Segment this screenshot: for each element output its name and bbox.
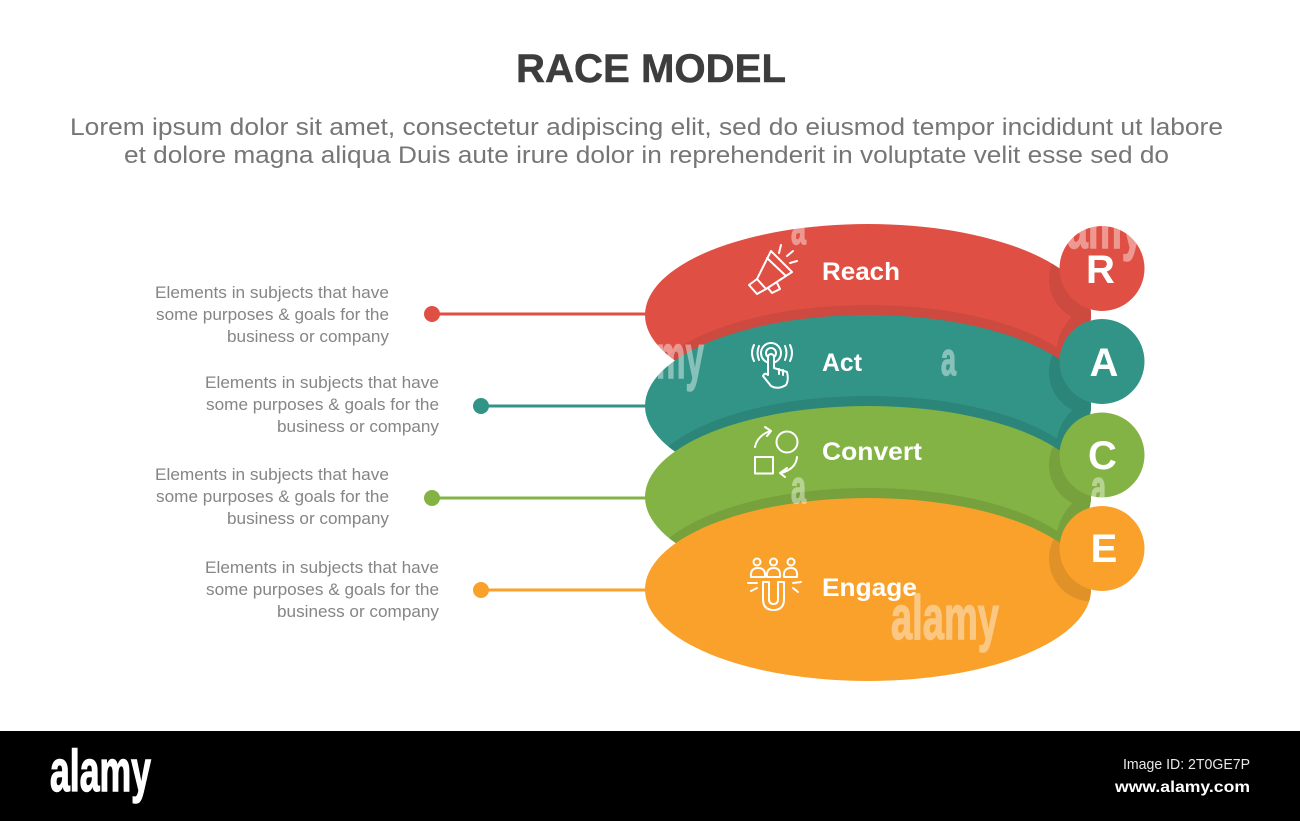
- label: Reach: Reach: [822, 258, 900, 286]
- description: reach: [155, 283, 390, 346]
- description: reach: Elements in subjects that have: [155, 283, 389, 302]
- watermark overlays: alamy: [1035, 193, 1143, 262]
- label: Engage: Engage: [822, 574, 917, 602]
- badge: C: [1060, 412, 1144, 498]
- badge: A: A: [1090, 341, 1118, 385]
- website: www.alamy.com: [1114, 779, 1250, 796]
- description: convert: business or company: [227, 509, 390, 528]
- connector: convert: [424, 490, 650, 506]
- description: convert: [155, 465, 390, 528]
- watermark overlays: a: [1091, 461, 1106, 513]
- title: RACE MODEL: [516, 47, 786, 91]
- watermark overlays: a: [941, 333, 956, 385]
- badge: E: [1060, 506, 1144, 591]
- subtitle: Lorem ipsum dolor sit amet, consectetur adipiscing elit, sed do eiusmod tempor incididunt ut labore: [70, 114, 1223, 141]
- icon: shapes and arrows: [755, 427, 798, 477]
- band: act: [645, 315, 1091, 452]
- band: engage: [645, 498, 1135, 681]
- description: engage: some purposes & goals for the: [206, 580, 439, 599]
- label: Convert: Convert: [822, 438, 923, 466]
- image id: Image ID: 2T0GE7P: [1123, 756, 1250, 773]
- badge: A: [1060, 319, 1144, 404]
- description: engage: [205, 558, 440, 621]
- connector: engage: [473, 582, 650, 598]
- badge: R: [1060, 226, 1144, 311]
- watermark overlays: alamy: [891, 584, 999, 653]
- description: act: business or company: [277, 417, 440, 436]
- description: engage: business or company: [277, 602, 440, 621]
- label: Act: Act: [822, 349, 863, 377]
- connector: reach: [424, 306, 650, 322]
- subtitle: et dolore magna aliqua Duis aute irure dolor in reprehenderit in voluptate velit esse sed do: [124, 142, 1169, 169]
- description: act: Elements in subjects that have: [205, 373, 439, 392]
- icon: magnet with people: [748, 558, 801, 610]
- description: act: [205, 373, 440, 436]
- watermark overlays: a: [791, 202, 806, 254]
- description: reach: business or company: [227, 327, 390, 346]
- watermark overlays: [656, 193, 1143, 653]
- badge: C: C: [1088, 434, 1117, 478]
- footer bar: [0, 731, 1300, 821]
- footer logo: alamy: [50, 739, 151, 804]
- description: act: some purposes & goals for the: [206, 395, 439, 414]
- subtitle: [70, 114, 1223, 169]
- badge: E: E: [1091, 527, 1117, 571]
- description: convert: Elements in subjects that have: [155, 465, 389, 484]
- icon: tap hand: [752, 343, 792, 388]
- watermark overlays: my: [656, 323, 704, 392]
- connector: act: [473, 398, 650, 414]
- band: convert: [645, 406, 1091, 544]
- badge: R: R: [1086, 248, 1115, 292]
- description: convert: some purposes & goals for the: [156, 487, 389, 506]
- band: reach: [645, 224, 1091, 360]
- description: reach: some purposes & goals for the: [156, 305, 389, 324]
- description: engage: Elements in subjects that have: [205, 558, 439, 577]
- watermark overlays: a: [791, 461, 806, 513]
- icon: megaphone: [749, 245, 797, 294]
